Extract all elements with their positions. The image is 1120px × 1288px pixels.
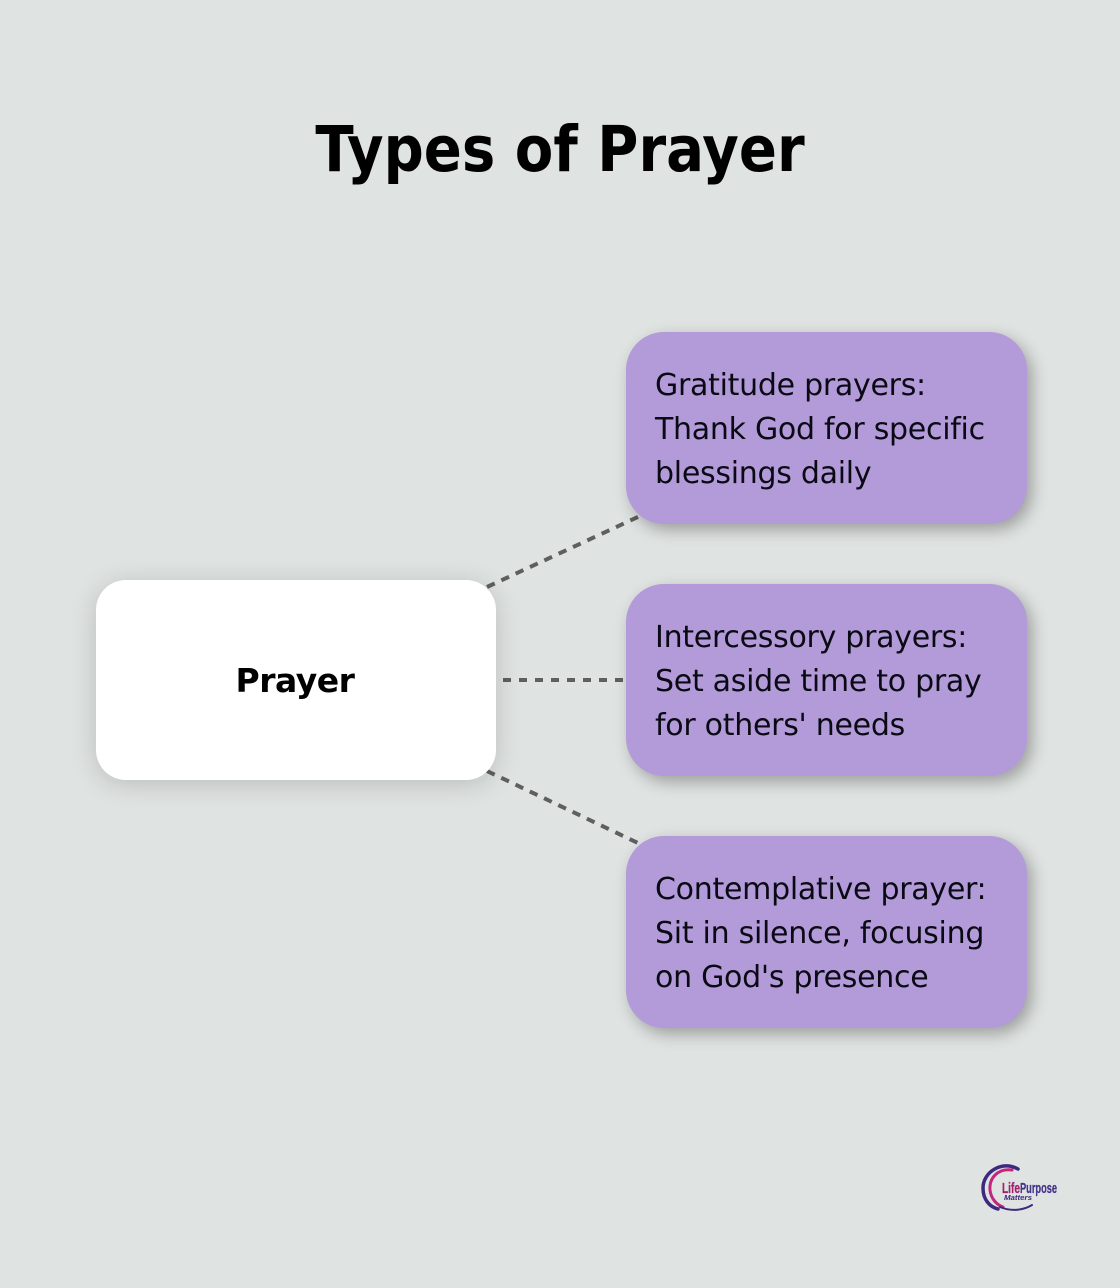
card: contemplative prayer bbox=[626, 836, 1027, 1028]
card: intercessory prayers: Set aside time to pray bbox=[655, 664, 982, 699]
card: gratitude prayers: blessings daily bbox=[655, 456, 871, 491]
card: intercessory prayers: for others' needs bbox=[655, 708, 905, 743]
card: contemplative prayer: Sit in silence, focusing bbox=[655, 916, 984, 951]
logo wordmark: Matters bbox=[1004, 1195, 1032, 1202]
logo: Life Purpose Matters bbox=[981, 1164, 1057, 1211]
card: intercessory prayers: Intercessory prayers: bbox=[655, 620, 967, 655]
card: contemplative prayer: on God's presence bbox=[655, 960, 928, 995]
central node: Prayer bbox=[96, 580, 496, 780]
card: gratitude prayers: Gratitude prayers: bbox=[655, 368, 926, 403]
card: contemplative prayer: Contemplative prayer: bbox=[655, 872, 986, 907]
logo arcs bbox=[983, 1166, 1032, 1210]
logo wordmark: Life bbox=[1002, 1180, 1020, 1197]
logo wordmark bbox=[1002, 1180, 1057, 1202]
card: gratitude prayers: Thank God for specific bbox=[655, 412, 985, 447]
card: gratitude prayers bbox=[626, 332, 1027, 524]
card: intercessory prayers bbox=[626, 584, 1027, 776]
central node label: Prayer bbox=[236, 661, 354, 700]
title: Types of Prayer bbox=[315, 113, 805, 186]
